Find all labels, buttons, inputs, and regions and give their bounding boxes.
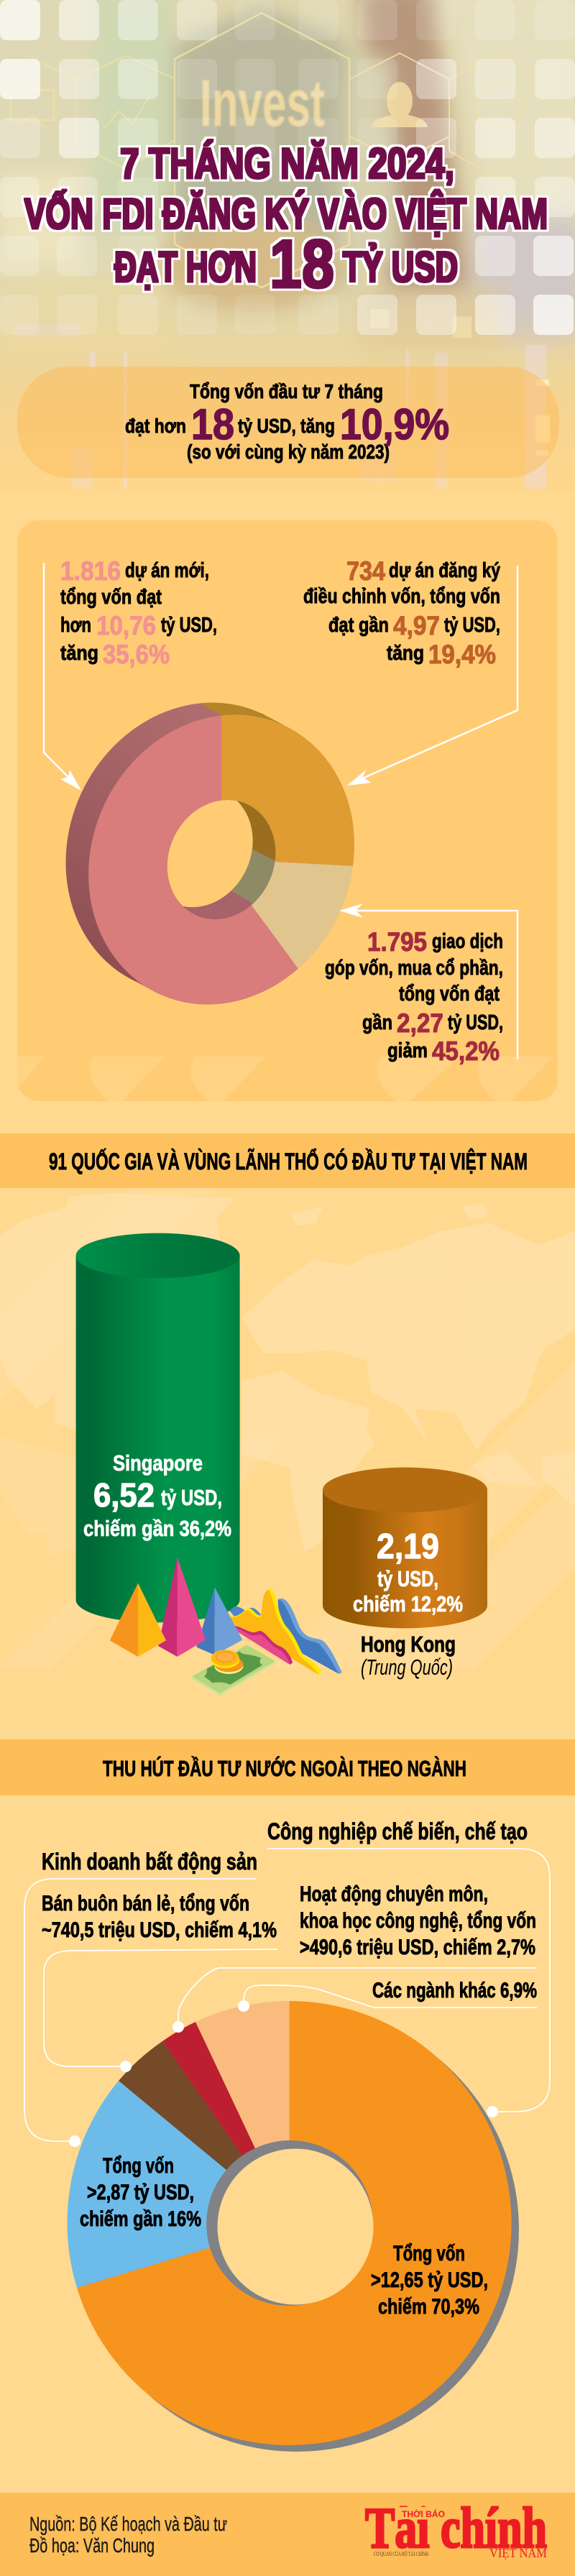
- donut shadow: [75, 2007, 519, 2452]
- text: share purchases: 2,27: [397, 1008, 443, 1038]
- summary text: (so với cùng kỳ năm 2023): [187, 441, 390, 463]
- leader line: retail: [44, 1949, 277, 2072]
- source text: [29, 2513, 227, 2557]
- title: ĐẠT HƠN: [114, 243, 257, 291]
- text: new projects: 35,6%: [103, 640, 170, 669]
- donut extrusion: [66, 703, 284, 994]
- sector labels: [42, 1818, 537, 2319]
- sector labels: Tổng vốn: [103, 2154, 174, 2178]
- Hong Kong value label: 2,19: [377, 1527, 439, 1566]
- logo: Tài chính: VIỆT NAM: [489, 2545, 547, 2560]
- Hong Kong value label: [353, 1527, 463, 1616]
- text: new projects: tăng: [60, 642, 98, 665]
- text: adjusted capital: điều chỉnh vốn, tổng vốn: [303, 585, 500, 608]
- footer band: [0, 2493, 575, 2576]
- world map background: [0, 1188, 575, 1668]
- donut hole: [167, 800, 276, 919]
- title: TỶ USD: [343, 243, 458, 291]
- logo: Tài chính: THỜI BÁO: [402, 2508, 445, 2519]
- Singapore label: 6,52: [93, 1476, 155, 1514]
- arrow: share purchases: [339, 903, 518, 1059]
- text: share purchases: [325, 927, 503, 1066]
- Singapore label: chiếm gần 36,2%: [83, 1516, 231, 1541]
- sector labels: Tổng vốn: [393, 2242, 465, 2266]
- Singapore label: tỷ USD,: [161, 1485, 222, 1510]
- logo: Tài chính: CƠ QUAN CỦA BỘ TÀI CHÍNH: [374, 2550, 428, 2557]
- summary text: [125, 380, 449, 463]
- Singapore label: [83, 1450, 231, 1541]
- sector labels: ~740,5 triệu USD, chiếm 4,1%: [42, 1918, 277, 1942]
- text: share purchases: 1.795: [367, 927, 427, 957]
- sector labels: Bán buôn bán lẻ, tổng vốn: [42, 1892, 249, 1915]
- text: adjusted capital: 19,4%: [428, 640, 496, 669]
- text: new projects: [60, 556, 217, 669]
- text: share purchases: gần: [362, 1011, 392, 1034]
- text: share purchases: tỷ USD,: [448, 1011, 503, 1034]
- leader line: other sectors: [238, 1985, 537, 2012]
- text: share purchases: góp vốn, mua cổ phần,: [325, 957, 503, 980]
- leader line: real estate: [24, 1879, 256, 2147]
- source text: Đồ họa: Văn Chung: [29, 2534, 155, 2557]
- text: new projects: 1.816: [60, 556, 121, 586]
- text: adjusted capital: [303, 556, 500, 669]
- leader line: professional activities: [172, 1968, 535, 2033]
- Hong Kong name: Hong Kong: [361, 1632, 456, 1657]
- heading band: countries: [0, 1133, 575, 1188]
- text: share purchases: giao dịch: [432, 930, 503, 953]
- Singapore label: Singapore: [113, 1450, 203, 1476]
- header photo background: [0, 0, 575, 491]
- title: [24, 139, 548, 303]
- summary text: 18: [191, 400, 234, 448]
- faint chevrons: [17, 1057, 553, 1101]
- arrow: new projects: [44, 563, 81, 791]
- leader line: manufacturing: [267, 1849, 550, 2117]
- Hong Kong name: (Trung Quốc): [361, 1655, 453, 1680]
- text: adjusted capital: tỷ USD,: [444, 614, 500, 637]
- text: new projects: 10,76: [96, 611, 156, 640]
- Hong Kong value label: tỷ USD,: [377, 1566, 438, 1591]
- text: new projects: tổng vốn đạt: [60, 586, 162, 609]
- Invest word in photo: Invest: [200, 67, 325, 140]
- sector labels: Hoạt động chuyên môn,: [300, 1882, 488, 1906]
- summary text: tỷ USD, tăng: [238, 415, 335, 437]
- text: adjusted capital: 4,97: [393, 611, 440, 640]
- text: adjusted capital: 734: [346, 556, 385, 586]
- 3D donut chart: [66, 703, 354, 1005]
- decorative rounded square grid: [0, 0, 575, 335]
- Hong Kong value label: chiếm 12,2%: [353, 1591, 463, 1616]
- segment: professional activities: [162, 2022, 255, 2156]
- source text: Nguồn: Bộ Kế hoạch và Đầu tư: [29, 2513, 227, 2535]
- icon: person: [372, 82, 428, 127]
- text: new projects: hơn: [60, 614, 91, 637]
- segment: manufacturing: [77, 2001, 512, 2445]
- arrow: adjusted capital: [347, 566, 518, 786]
- diagonal stripes: [0, 1188, 575, 1668]
- Hong Kong name: [361, 1632, 456, 1680]
- title: 7 THÁNG NĂM 2024,: [120, 139, 454, 188]
- text: new projects: dự án mới,: [125, 559, 209, 582]
- sector labels: Kinh doanh bất động sản: [42, 1849, 257, 1874]
- panel: project breakdown: [17, 520, 558, 1101]
- title: 18: [270, 226, 334, 303]
- donut chart: sectors: [68, 2001, 519, 2452]
- text: adjusted capital: dự án đăng ký: [389, 559, 500, 582]
- sector labels: chiếm gần 16%: [80, 2207, 201, 2231]
- icon: presentation board: [11, 90, 54, 120]
- text: new projects: tỷ USD,: [161, 614, 217, 637]
- summary text: 10,9%: [340, 400, 449, 448]
- donut front face: [88, 714, 354, 1005]
- donut hole: [208, 2140, 373, 2306]
- sector labels: chiếm 70,3%: [378, 2295, 479, 2319]
- summary text: Tổng vốn đầu tư 7 tháng: [190, 380, 383, 402]
- text: adjusted capital: tăng: [387, 642, 424, 665]
- header icons: invest hexagons: [11, 13, 548, 288]
- cylinder: Singapore: [76, 1233, 240, 1622]
- sector labels: >2,87 tỷ USD,: [87, 2181, 194, 2204]
- segment: retail: [119, 2041, 242, 2170]
- segment: real estate: [68, 2081, 226, 2288]
- segment: other: [196, 2001, 289, 2148]
- summary text: đạt hơn: [125, 415, 186, 437]
- sector labels: >12,65 tỷ USD,: [371, 2268, 488, 2292]
- text: share purchases: 45,2%: [432, 1036, 500, 1066]
- text: share purchases: giảm: [387, 1039, 428, 1062]
- text: adjusted capital: đạt gần: [328, 614, 389, 637]
- cylinder: Hong Kong: [323, 1468, 487, 1628]
- heading band: sectors: [0, 1739, 575, 1795]
- icon: globe: [477, 82, 523, 128]
- illustration: pyramids, charts and money: [110, 1558, 342, 1696]
- text: share purchases: tổng vốn đạt: [399, 983, 500, 1006]
- panel: summary pill: [17, 367, 559, 478]
